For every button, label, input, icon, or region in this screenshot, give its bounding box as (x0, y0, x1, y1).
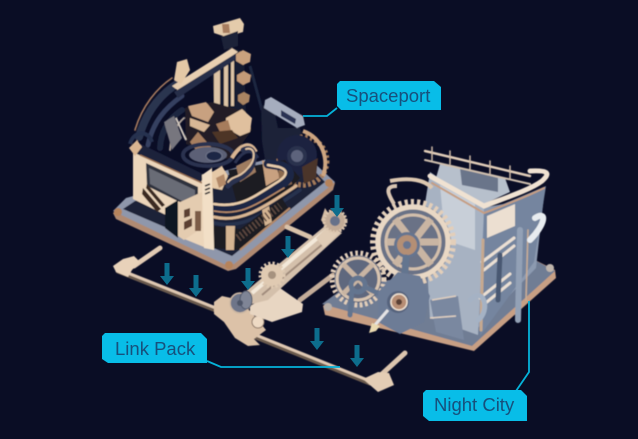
tower (211, 48, 246, 125)
large gear (375, 204, 451, 280)
curved track (214, 149, 300, 224)
top ring (321, 208, 336, 228)
left corner joint (113, 256, 140, 277)
callout: Night City: Night City (434, 394, 515, 415)
side cubes (236, 50, 251, 65)
model: Spaceport (113, 18, 335, 271)
right side interior (228, 160, 300, 208)
leader line: Spaceport (303, 108, 337, 116)
blue crank arms (350, 258, 406, 315)
arrows: assembly direction (160, 195, 364, 367)
callout: Link Pack: Link Pack (115, 338, 196, 359)
lower right deck (212, 198, 288, 250)
top bowl (183, 144, 233, 166)
model: Night City (322, 147, 556, 351)
small gear (334, 255, 382, 303)
lower blocks (430, 296, 464, 340)
front panel (133, 145, 214, 250)
base plate (323, 258, 556, 351)
model: Link Pack (113, 208, 405, 392)
top rail (425, 147, 547, 330)
frame rails (118, 227, 405, 383)
roller tube (245, 225, 342, 304)
leader line: Night City (516, 301, 529, 391)
core mechanism (185, 102, 252, 160)
cup roller (230, 293, 250, 313)
spur gear (261, 264, 283, 286)
centre joint (214, 296, 266, 346)
callout: Spaceport: Spaceport (346, 85, 430, 106)
tower cap (213, 18, 244, 37)
flat plate (250, 288, 303, 322)
callout: Night City (423, 390, 527, 421)
base plate (113, 150, 335, 271)
right corner joint (363, 372, 394, 392)
callout: Link Pack (102, 333, 207, 363)
callout: Spaceport (337, 81, 441, 110)
right gear tower (261, 104, 306, 178)
building (430, 172, 544, 330)
leader line: Link Pack (207, 361, 340, 367)
rear arches (135, 78, 184, 150)
